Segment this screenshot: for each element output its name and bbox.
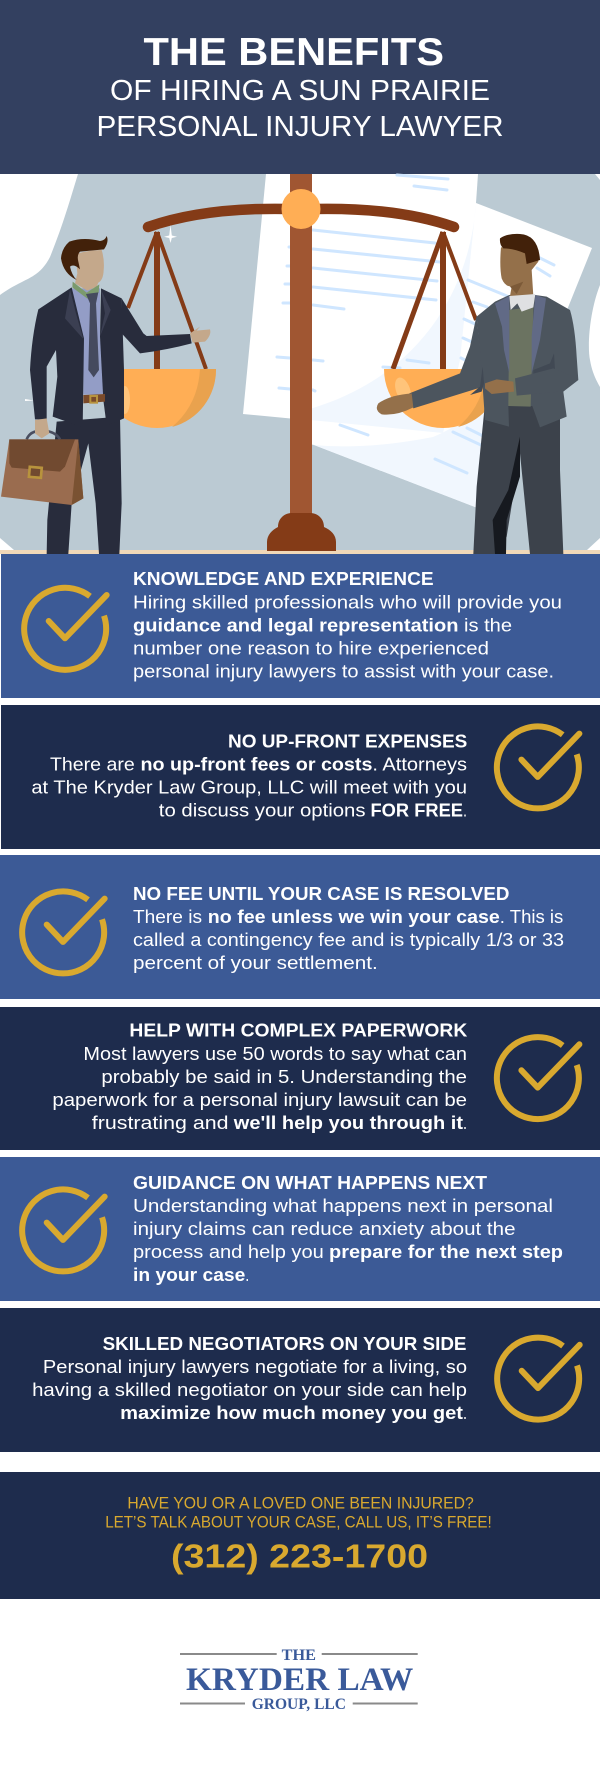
- text block: [133, 568, 562, 681]
- logo: The Kryder Law Group, LLC: GROUP, LLC: [252, 1696, 346, 1713]
- text block: .: [245, 1264, 249, 1285]
- text block: number one reason to hire experienced: [133, 637, 489, 658]
- text block: NO UP-FRONT EXPENSES: [228, 730, 467, 751]
- left pan and strings: [98, 232, 216, 428]
- scale: [98, 174, 502, 551]
- text block: paperwork for a personal injury lawsuit can be: [52, 1089, 467, 1110]
- text block: maximize how much money you get: [120, 1402, 463, 1423]
- text block: [133, 883, 564, 973]
- document pages: [243, 174, 592, 510]
- text block: [31, 730, 467, 820]
- text block: having a skilled negotiator on your side can help: [32, 1379, 467, 1400]
- text block: .: [463, 1402, 467, 1423]
- pivot: [282, 189, 320, 229]
- text block: personal injury lawyers to assist with your case.: [133, 660, 554, 681]
- lawyer: right figure: [377, 234, 578, 554]
- text block: to discuss your options: [159, 799, 366, 820]
- illustration: scales of justice with two lawyers: [0, 174, 600, 554]
- base: [267, 513, 336, 551]
- panel: no fee until resolved: [0, 855, 600, 999]
- text block: called a contingency fee and is typically 1/3 or 33: [133, 929, 564, 950]
- icon: check circle: [497, 1037, 579, 1119]
- call to action text: LET’S TALK ABOUT YOUR CASE, CALL US, IT’S FREE!: [105, 1514, 492, 1532]
- text block: probably be said in 5. Understanding the: [101, 1066, 467, 1087]
- text block: FOR FREE: [370, 799, 463, 820]
- text block: NO FEE UNTIL YOUR CASE IS RESOLVED: [133, 883, 509, 904]
- text block: Understanding what happens next in personal: [133, 1195, 553, 1216]
- text block: SKILLED NEGOTIATORS ON YOUR SIDE: [103, 1333, 466, 1354]
- text block: prepare for the next step: [329, 1241, 563, 1262]
- text block: KNOWLEDGE AND EXPERIENCE: [133, 568, 434, 589]
- logo: The Kryder Law Group, LLC: [180, 1647, 418, 1713]
- text block: we'll help you through it: [233, 1112, 463, 1133]
- text block: frustrating and: [92, 1112, 228, 1133]
- icon: check circle: [22, 1189, 105, 1271]
- briefcase: [1, 439, 83, 505]
- call to action text: [105, 1495, 492, 1532]
- pole: [290, 174, 312, 519]
- panel: knowledge and experience: [1, 554, 600, 698]
- panel: call to action: [0, 1472, 600, 1599]
- logo: The Kryder Law Group, LLC: KRYDER LAW: [186, 1662, 413, 1698]
- lawyer: left figure: [1, 236, 210, 554]
- text block: Most lawyers use 50 words to say what can: [83, 1043, 467, 1064]
- text block: no fee unless we win your case: [208, 906, 500, 927]
- text block: GUIDANCE ON WHAT HAPPENS NEXT: [133, 1172, 488, 1193]
- panel: no up-front expenses: [1, 705, 600, 849]
- right pan and strings: [384, 232, 502, 428]
- panel: skilled negotiators: [0, 1308, 600, 1452]
- text block: in your case: [133, 1264, 245, 1285]
- icon: check circle: [497, 1338, 580, 1420]
- beam: [148, 209, 454, 227]
- text block: .: [463, 1112, 467, 1133]
- text block: Personal injury lawyers negotiate for a living, so: [43, 1356, 467, 1377]
- text block: [133, 1172, 563, 1285]
- icon: check circle: [24, 588, 107, 670]
- text block: no up-front fees or costs: [140, 753, 372, 774]
- panel: help with complex paperwork: [0, 1007, 600, 1150]
- text block: . Attorneys: [372, 753, 467, 774]
- icon: check circle: [497, 726, 579, 808]
- title: [96, 31, 504, 143]
- text block: .: [463, 799, 467, 820]
- text block: [32, 1333, 467, 1423]
- text block: . This is: [500, 906, 563, 927]
- title: THE BENEFITS: [144, 31, 444, 74]
- panel: guidance on what happens next: [0, 1157, 600, 1301]
- phone number: (312) 223-1700: [171, 1537, 428, 1574]
- logo: The Kryder Law Group, LLC: THE: [282, 1647, 316, 1664]
- sparkle: [164, 225, 177, 243]
- text block: percent of your settlement.: [133, 952, 378, 973]
- header panel: [0, 0, 600, 174]
- text block: Hiring skilled professionals who will provide you: [133, 591, 562, 612]
- text block: [52, 1020, 468, 1133]
- text block: guidance and legal representation: [133, 614, 458, 635]
- call to action text: HAVE YOU OR A LOVED ONE BEEN INJURED?: [127, 1495, 474, 1513]
- text block: HELP WITH COMPLEX PAPERWORK: [129, 1020, 468, 1041]
- title: PERSONAL INJURY LAWYER: [96, 111, 504, 143]
- text block: There is: [133, 906, 202, 927]
- title: OF HIRING A SUN PRAIRIE: [110, 75, 490, 107]
- text block: There are: [50, 753, 135, 774]
- text block: injury claims can reduce anxiety about the: [133, 1218, 516, 1239]
- text block: process and help you: [133, 1241, 324, 1262]
- text block: is the: [464, 614, 512, 635]
- icon: check circle: [22, 891, 105, 973]
- text block: at The Kryder Law Group, LLC will meet with you: [31, 776, 467, 797]
